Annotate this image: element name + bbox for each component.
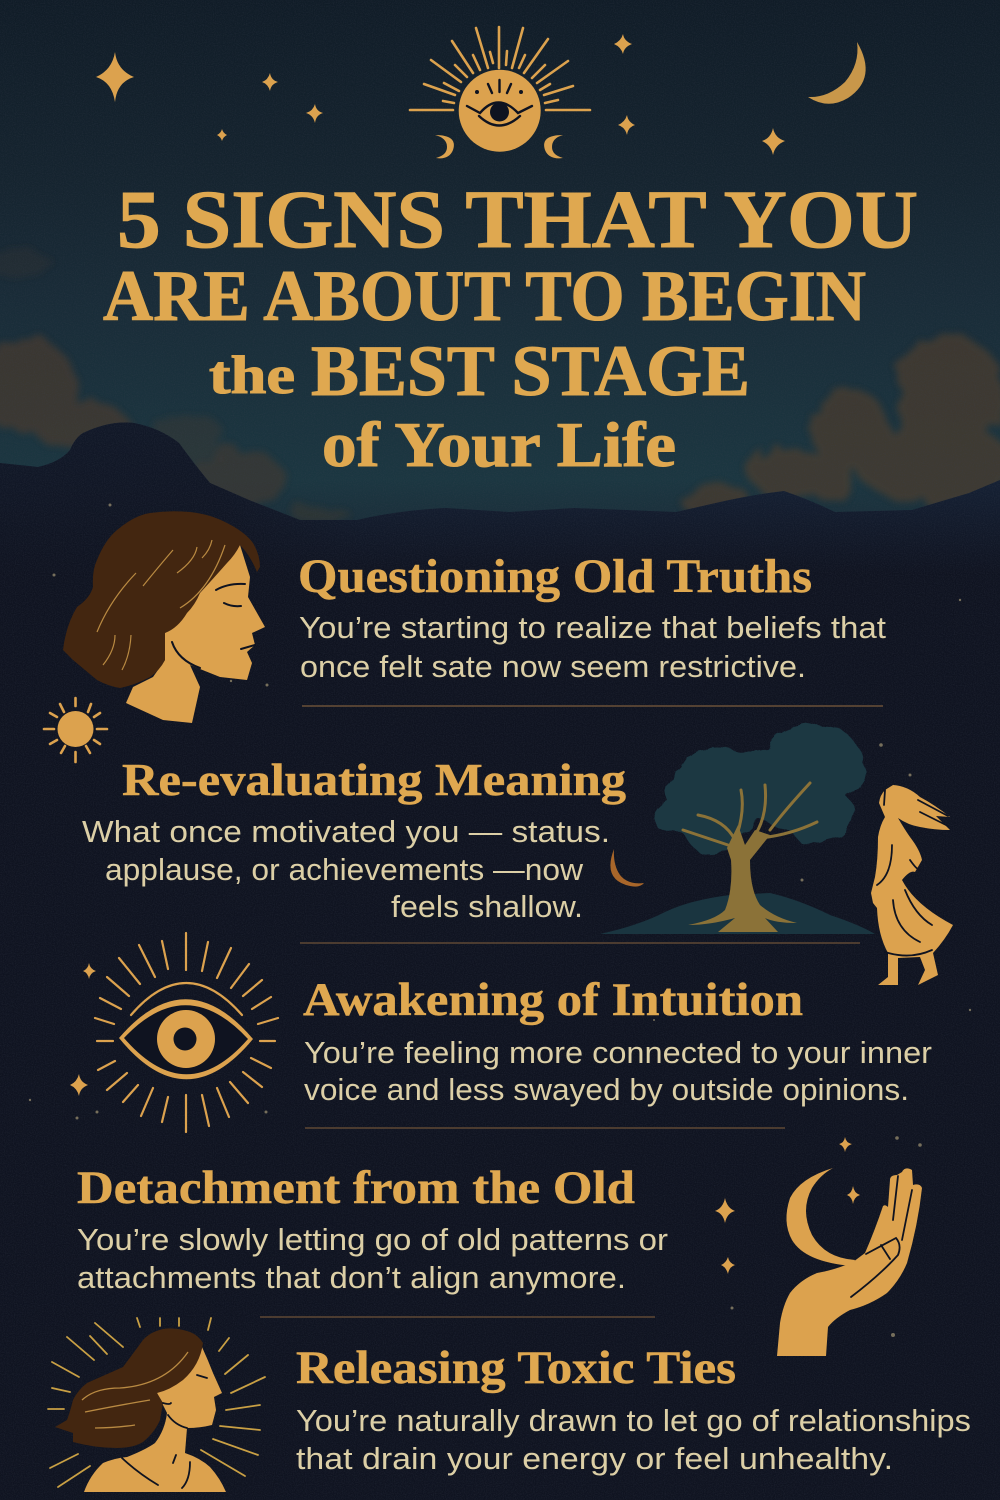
heading: sign 5: Releasing Toxic Ties: [296, 1342, 736, 1394]
heading: sign 3: Awakening of Intuition: [303, 974, 803, 1026]
panel: sign 5 illustration, woman with rays: [48, 1318, 265, 1492]
panel: sign 2 illustration, tree and hill: [600, 724, 875, 934]
text block: sign 2: feels shallow.: [391, 889, 583, 924]
text block: sign 2: What once motivated you — status.: [82, 814, 610, 849]
icon: small sun: [44, 698, 107, 762]
text block: sign 3: [304, 1035, 932, 1107]
title: ARE ABOUT TO BEGIN: [103, 256, 866, 336]
icon: all-seeing eye: [70, 933, 278, 1132]
heading: sign 4: Detachment from the Old: [77, 1162, 635, 1214]
text block: sign 5: You’re naturally drawn to let go of relationships: [296, 1403, 971, 1438]
text block: sign 4: attachments that don’t align anymore.: [77, 1260, 626, 1295]
title: 5 SIGNS THAT YOU: [117, 173, 918, 265]
text block: sign 3: You’re feeling more connected to your inner: [304, 1035, 932, 1070]
title: of Your Life: [322, 409, 676, 480]
text block: sign 1: You’re starting to realize that beliefs that: [299, 610, 886, 645]
icon: top sun with eye: [410, 27, 590, 158]
text block: sign 4: [77, 1222, 668, 1295]
title: [103, 173, 918, 480]
icon: crescent moon: [808, 42, 866, 104]
icon: top stars: [96, 34, 785, 155]
clouds left: [0, 251, 285, 510]
icon: small crescent: [610, 849, 644, 887]
clouds right: [290, 335, 1000, 525]
text block: sign 2: [82, 814, 610, 924]
title: the: [209, 345, 295, 405]
decorative star field: [29, 504, 971, 1337]
text block: sign 1: once felt sate now seem restrictive.: [300, 649, 806, 684]
text block: sign 5: that drain your energy or feel unhealthy.: [296, 1441, 893, 1476]
text block: sign 3: voice and less swayed by outside opinions.: [304, 1072, 909, 1107]
text block: sign 4: You’re slowly letting go of old patterns or: [77, 1222, 668, 1257]
panel: sign 1 illustration, woman with closed eyes: [63, 511, 265, 723]
mountains: [0, 422, 1000, 1500]
icon: hand holding crescent moon: [715, 1137, 922, 1356]
text block: sign 1: [299, 610, 886, 684]
title: BEST STAGE: [311, 331, 750, 411]
text block: sign 5: [296, 1403, 971, 1476]
heading: sign 1: Questioning Old Truths: [298, 550, 812, 603]
text block: sign 2: applause, or achievements —now: [105, 852, 584, 887]
panel: sign 2 illustration, walking woman: [871, 785, 953, 985]
heading: sign 2: Re-evaluating Meaning: [122, 754, 626, 805]
